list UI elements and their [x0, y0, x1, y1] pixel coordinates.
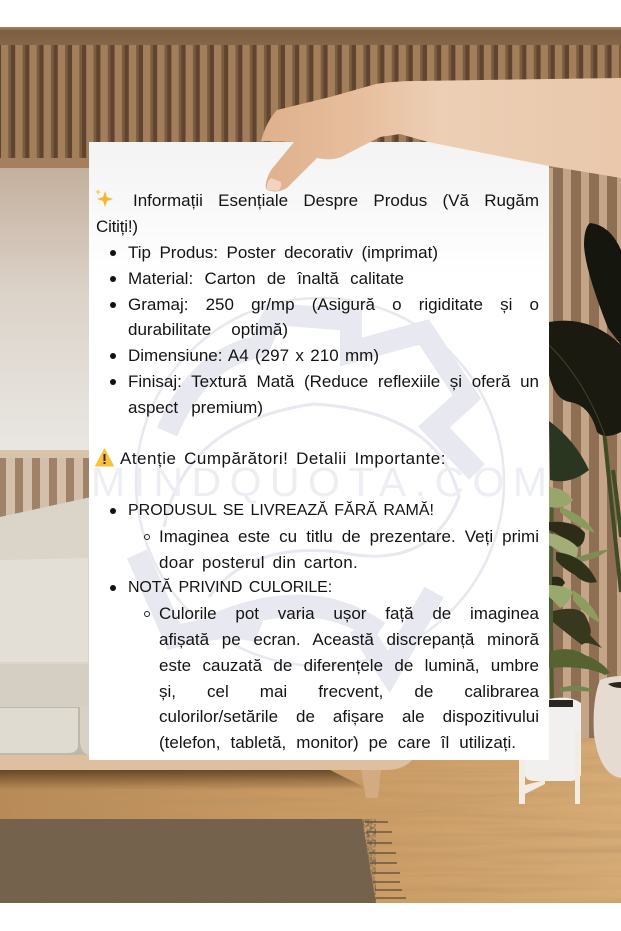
list: colour note: [110, 578, 539, 752]
list: colour note: afișată pe ecran. Această discrepanță minoră: [159, 630, 539, 649]
wall and slat panelling: [0, 27, 621, 748]
large beige pot: [594, 676, 621, 778]
list: product specifications: Material: Carton de înaltă calitate: [128, 269, 404, 288]
list: frame notice: PRODUSUL SE LIVREAZĂ FĂRĂ RAMĂ!: [128, 502, 434, 519]
tall banana plant: [549, 223, 621, 592]
list: frame notice: doar posterul din carton.: [159, 553, 358, 572]
list: colour note: (telefon, tabletă, monitor) pe care îl utilizați.: [159, 733, 516, 752]
list: product specifications: durabilitate optimă): [128, 320, 288, 339]
poster sheet: [89, 142, 549, 760]
list: product specifications: Finisaj: Textură Mată (Reduce reflexiile și oferă un: [128, 372, 539, 391]
sofa: [0, 495, 415, 798]
text block: product information: [95, 189, 539, 417]
list: product specifications: Tip Produs: Poster decorativ (imprimat): [128, 243, 438, 262]
list: colour note: este cauzată de diferențele de lumină, umbre: [159, 656, 539, 675]
icon: warning triangle: [95, 448, 114, 466]
list: product specifications: Gramaj: 250 gr/mp (Asigură o rigiditate și o: [128, 295, 539, 314]
list: colour note: culorilor/setările de afișare ale dispozitivului: [159, 707, 539, 726]
list: colour note: și, cel mai frecvent, de calibrarea: [159, 682, 539, 701]
list: frame notice: Imaginea este cu titlu de prezentare. Veți primi: [159, 527, 539, 546]
heading: attention: Atenție Cumpărători! Detalii Importante:: [120, 449, 446, 468]
wooden floor: [0, 738, 621, 903]
watermark: MINDQUOTA.COM: [91, 459, 547, 505]
heading: essential information: Informații Esențiale Despre Produs (Vă Rugăm: [133, 191, 539, 210]
list: colour note: Culorile pot varia ușor față de imaginea: [159, 604, 539, 623]
white plant pot on stand: [519, 698, 581, 804]
rug with fringe: [0, 819, 406, 903]
watermark: [91, 296, 547, 693]
text block: attention buyers: [95, 448, 539, 752]
list: frame notice: [110, 501, 539, 572]
list: product specifications: [110, 243, 539, 417]
variegated plant: [549, 487, 610, 700]
text block: product information: Citiți!): [96, 217, 138, 236]
icon: sparkles: [95, 189, 113, 207]
list: colour note: NOTĂ PRIVIND CULORILE:: [128, 579, 332, 596]
list: product specifications: Dimensiune: A4 (297 x 210 mm): [128, 346, 379, 365]
list: product specifications: aspect premium): [128, 398, 263, 417]
